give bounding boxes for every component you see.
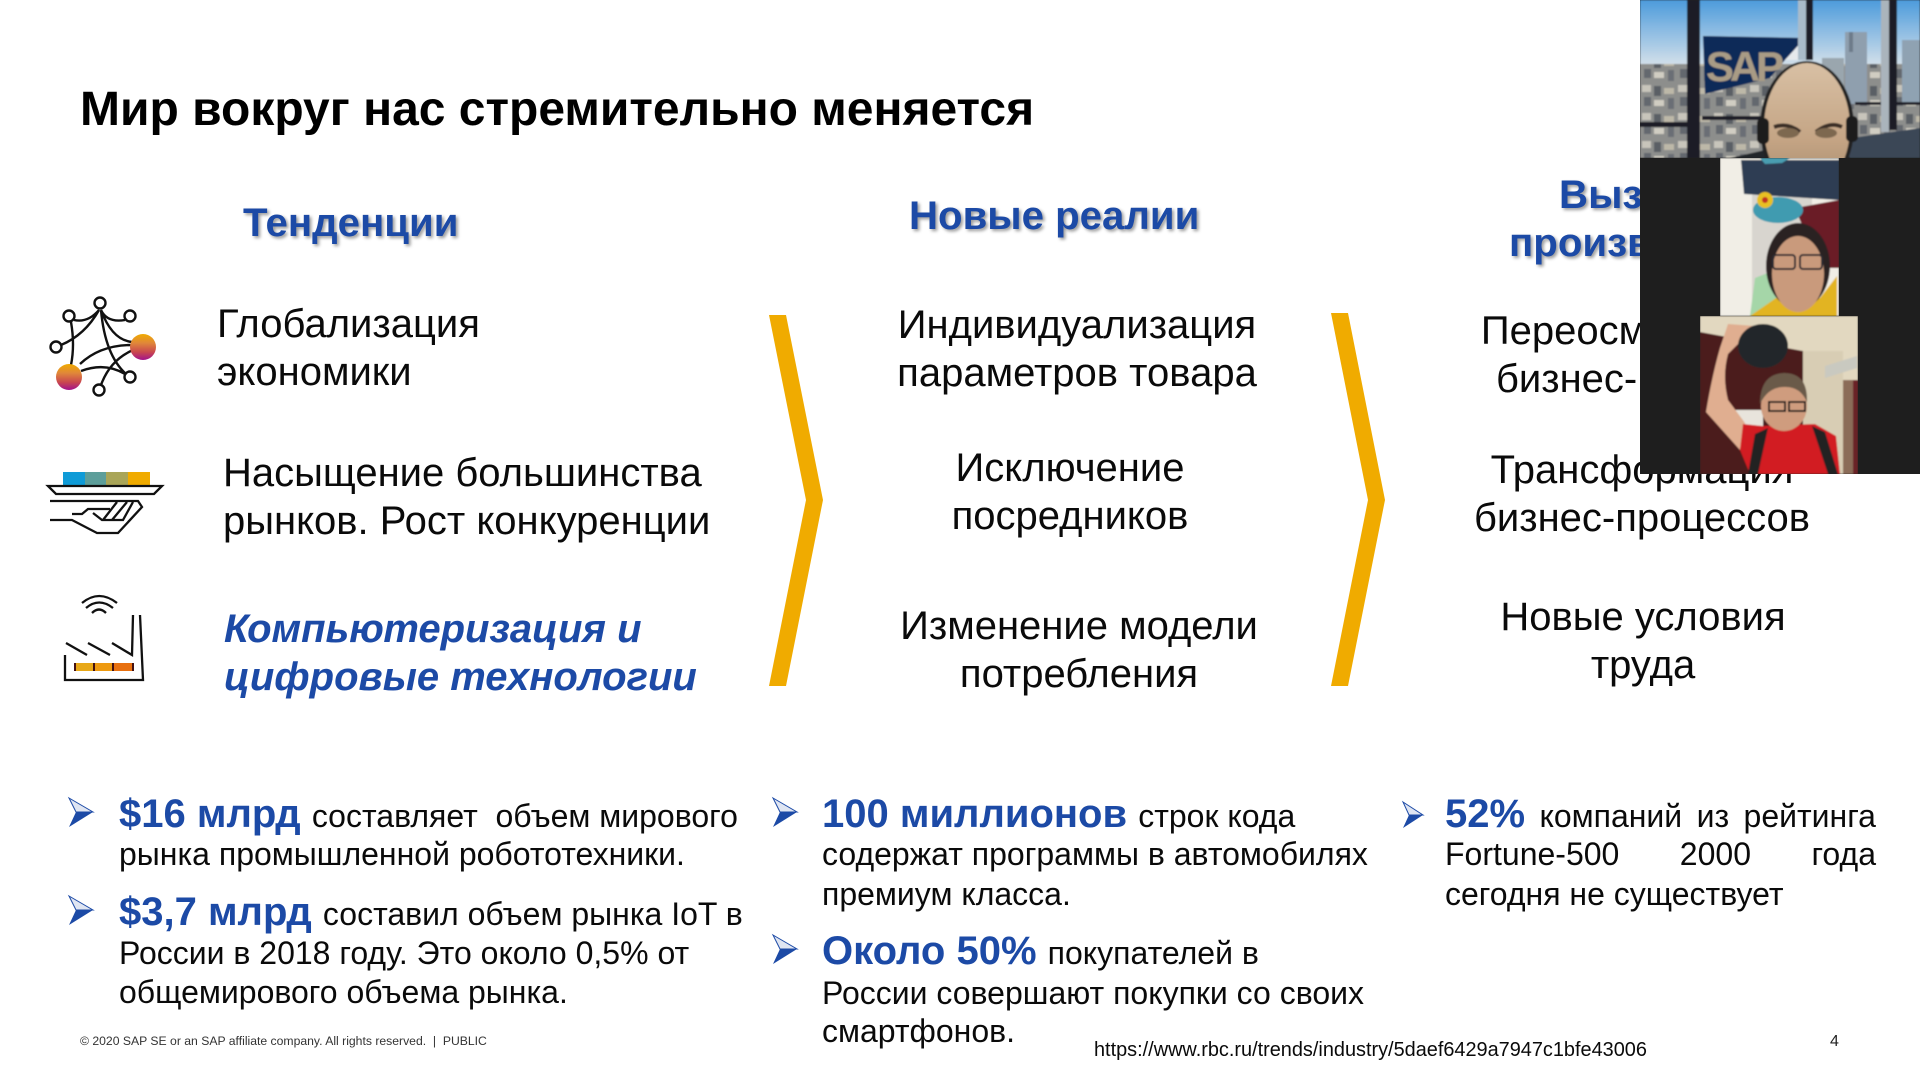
- challenge: process transformation: Трансформация: [1491, 448, 1793, 492]
- heading: challenges for production: Вызовы: [1559, 172, 1725, 217]
- stat: IoT market: $3,7 млрд составил объем рынка IoT в: [119, 890, 743, 934]
- stat: lines of code: премиум класса.: [822, 876, 1071, 912]
- reality: individualization: параметров товара: [897, 351, 1257, 395]
- arrow: second chevron: [1331, 313, 1385, 686]
- reality: no intermediaries: [952, 446, 1188, 538]
- reality: consumption model: [900, 604, 1258, 696]
- heading: trends: Тенденции: [243, 200, 458, 245]
- heading: challenges for production: производству: [1509, 220, 1788, 265]
- heading: new realities: Новые реалии: [909, 193, 1199, 238]
- arrow: first chevron: [769, 315, 823, 686]
- stat: lines of code: [822, 792, 1368, 912]
- challenge: rethink business models: бизнес-модели: [1496, 357, 1776, 401]
- stat: Fortune-500: компаний: [1539, 798, 1682, 834]
- challenge: new labour conditions: труда: [1591, 643, 1695, 687]
- stat: Fortune-500: 2000: [1680, 836, 1751, 872]
- reality: no intermediaries: Исключение: [956, 446, 1184, 490]
- trend: globalization: Глобализация: [217, 302, 480, 346]
- trend: digital technologies: [224, 607, 697, 699]
- challenge: rethink business models: Переосмысление: [1481, 309, 1807, 353]
- footer copyright: © 2020 SAP SE or an SAP affiliate company. All rights reserved. | PUBLIC: [80, 1034, 487, 1048]
- reality: consumption model: потребления: [960, 652, 1198, 696]
- trend: globalization: экономики: [217, 350, 412, 394]
- challenge: new labour conditions: Новые условия: [1500, 595, 1786, 639]
- stat: robotics market: $16 млрд составляет объем мирового: [119, 792, 738, 836]
- title: Мир вокруг нас стремительно меняется: [80, 83, 1034, 136]
- stat: IoT market: [119, 890, 743, 1010]
- trend: digital technologies: Компьютеризация и: [224, 607, 642, 651]
- source url: https://www.rbc.ru/trends/industry/5daef6429a7947c1bfe43006: [1094, 1039, 1647, 1061]
- stat: Fortune-500: 52%: [1445, 792, 1525, 836]
- icon: connected factory: [64, 594, 144, 682]
- bullet arrows: [68, 796, 1424, 964]
- video: speaker with SAP banner: SAP: [1706, 43, 1784, 90]
- stat: Fortune-500: рейтинга: [1744, 798, 1876, 834]
- stat: smartphone purchases: [822, 929, 1364, 1049]
- icon: hand with tray: [45, 472, 165, 534]
- reality: no intermediaries: посредников: [952, 494, 1188, 538]
- video: participant in red shirt: [1700, 316, 1858, 474]
- stat: smartphone purchases: России совершают покупки со своих: [822, 975, 1364, 1011]
- trend: market saturation: рынков. Рост конкуренции: [223, 499, 710, 543]
- page number: 4: [1830, 1033, 1839, 1050]
- video: participant with glasses: [1720, 158, 1839, 316]
- challenge: process transformation: бизнес-процессов: [1474, 496, 1810, 540]
- stat: smartphone purchases: смартфонов.: [822, 1013, 1015, 1049]
- trend: market saturation: Насыщение большинства: [223, 451, 702, 495]
- stat: Fortune-500: года: [1811, 836, 1876, 872]
- stat: lines of code: 100 миллионов строк кода: [822, 792, 1295, 836]
- challenge: new labour conditions: [1500, 595, 1786, 687]
- video panel: [1640, 0, 1920, 474]
- stat: IoT market: России в 2018 году. Это около 0,5% от: [119, 935, 689, 971]
- trend: globalization: [217, 302, 480, 394]
- stat: Fortune-500: [1445, 792, 1876, 912]
- challenge: rethink business models: [1481, 309, 1807, 401]
- stat: Fortune-500: Fortune-500: [1445, 836, 1619, 872]
- stat: lines of code: содержат программы в автомобилях: [822, 836, 1368, 872]
- stat: robotics market: [119, 792, 738, 872]
- stat: Fortune-500: сегодня не существует: [1445, 876, 1784, 912]
- heading: challenges for production: [1509, 172, 1788, 268]
- trend: digital technologies: цифровые технологии: [224, 655, 697, 699]
- video: speaker with SAP banner: [1640, 0, 1920, 158]
- challenge: process transformation: [1474, 448, 1810, 540]
- stat: Fortune-500: из: [1697, 798, 1729, 834]
- stat: robotics market: рынка промышленной робототехники.: [119, 836, 685, 872]
- stat: smartphone purchases: Около 50% покупателей в: [822, 929, 1259, 973]
- trend: market saturation: [223, 451, 710, 543]
- reality: consumption model: Изменение модели: [900, 604, 1258, 648]
- reality: individualization: Индивидуализация: [898, 303, 1256, 347]
- stat: IoT market: общемирового объема рынка.: [119, 974, 568, 1010]
- icon: global network: [49, 296, 156, 397]
- reality: individualization: [897, 303, 1257, 395]
